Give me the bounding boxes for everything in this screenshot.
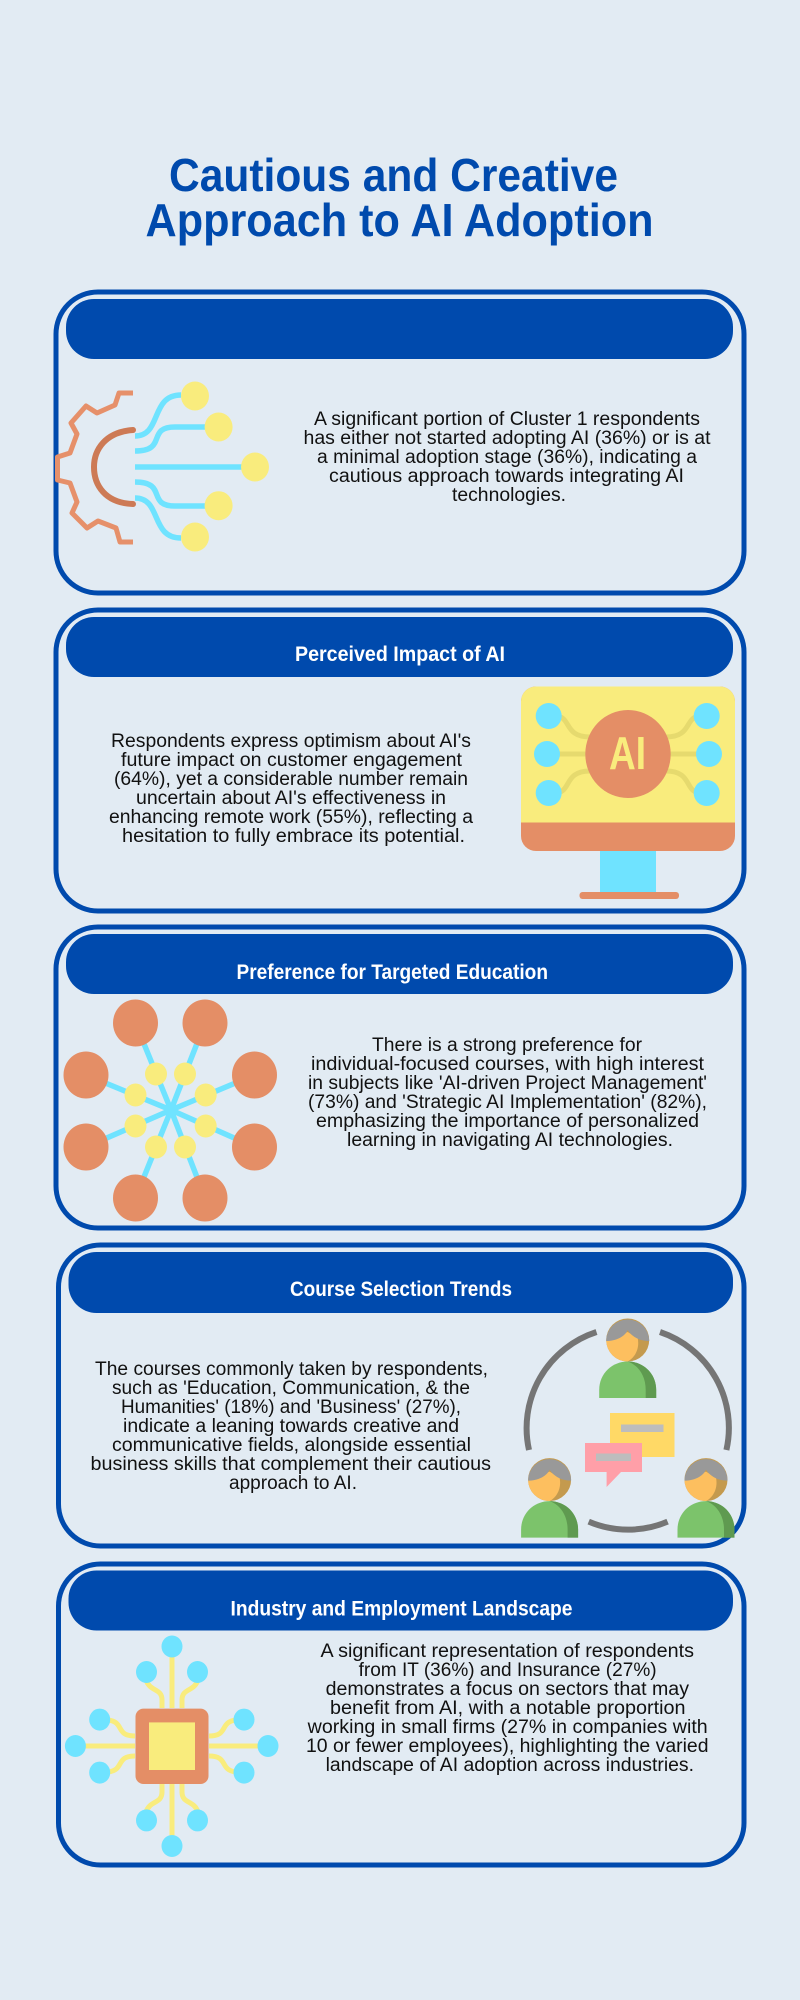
text block: course selection: communicative fields, alongside essential <box>112 1435 471 1456</box>
person: right <box>678 1458 734 1538</box>
text block: targeted education: (73%) and 'Strategic AI Implementation' (82%), <box>308 1092 707 1113</box>
text block: industry landscape: benefit from AI, with a notable proportion <box>330 1698 686 1719</box>
text block: targeted education: learning in navigating AI technologies. <box>347 1130 673 1151</box>
text block: industry landscape: working in small firms (27% in companies with <box>307 1717 708 1738</box>
icon: radial network <box>64 1000 277 1222</box>
text block: course selection: The courses commonly taken by respondents, <box>95 1359 488 1380</box>
header bar <box>66 617 733 677</box>
text block: perceived impact: (64%), yet a considerable number remain <box>114 769 468 790</box>
text block: course selection <box>90 1359 491 1494</box>
panel: perceived impact <box>56 610 744 911</box>
text block: industry landscape: landscape of AI adoption across industries. <box>326 1755 694 1776</box>
text block: industry landscape: A significant representation of respondents <box>320 1641 694 1662</box>
header bar <box>68 1570 733 1630</box>
header bar <box>66 934 733 994</box>
title: Approach to AI Adoption <box>146 194 654 246</box>
header bar: Course Selection Trends <box>290 1278 512 1301</box>
text block: adoption stage: cautious approach towards integrating AI <box>329 466 684 487</box>
text block: adoption stage: has either not started adopting AI (36%) or is at <box>304 428 711 449</box>
title: Cautious and Creative <box>169 149 618 201</box>
text block: targeted education <box>308 1035 707 1151</box>
title <box>146 149 654 246</box>
person: top <box>599 1318 656 1398</box>
icon: gear with network lines <box>58 382 269 552</box>
person: left <box>521 1458 578 1538</box>
header bar: Industry and Employment Landscape <box>230 1598 572 1620</box>
text block: industry landscape <box>306 1641 708 1776</box>
text block: perceived impact: Respondents express optimism about AI's <box>111 731 471 752</box>
header bar: Perceived Impact of AI <box>295 643 505 666</box>
header bar: empty <box>66 299 733 359</box>
panel: targeted education <box>56 927 744 1228</box>
text block: course selection: approach to AI. <box>229 1473 357 1494</box>
text block: targeted education: individual-focused courses, with high interest <box>311 1054 705 1075</box>
text block: adoption stage: A significant portion of Cluster 1 respondents <box>314 409 700 430</box>
text block: targeted education: emphasizing the importance of personalized <box>316 1111 699 1132</box>
text block: perceived impact <box>109 731 473 847</box>
text block: targeted education: in subjects like 'AI-driven Project Management' <box>308 1073 707 1094</box>
text block: adoption stage: technologies. <box>452 485 566 506</box>
text block: industry landscape: demonstrates a focus on sectors that may <box>326 1679 690 1700</box>
panel: course selection <box>58 1245 744 1546</box>
icon: AI monitor <box>521 686 735 899</box>
text block: course selection: indicate a leaning towards creative and <box>123 1416 459 1437</box>
text block: industry landscape: from IT (36%) and Insurance (27%) <box>359 1660 657 1681</box>
header bar: Preference for Targeted Education <box>236 961 548 984</box>
header bar <box>68 1252 733 1313</box>
text block: course selection: business skills that complement their cautious <box>90 1454 491 1475</box>
text block: perceived impact: future impact on customer engagement <box>121 750 463 771</box>
panel: industry landscape <box>58 1564 744 1865</box>
text block: adoption stage: a minimal adoption stage (36%), indicating a <box>317 447 697 468</box>
icon: microchip <box>65 1636 279 1857</box>
text block: perceived impact: hesitation to fully embrace its potential. <box>122 826 465 847</box>
text block: industry landscape: 10 or fewer employees), highlighting the varied <box>306 1736 708 1757</box>
icon: AI monitor: AI <box>609 727 646 779</box>
icon: people in discussion <box>521 1318 734 1538</box>
text block: perceived impact: uncertain about AI's effectiveness in <box>136 788 446 809</box>
text block: course selection: such as 'Education, Communication, & the <box>112 1378 470 1399</box>
text block: perceived impact: enhancing remote work (55%), reflecting a <box>109 807 473 828</box>
text block: course selection: Humanities' (18%) and 'Business' (27%), <box>121 1397 461 1418</box>
panel: adoption stage <box>56 292 744 593</box>
text block: adoption stage <box>304 409 711 506</box>
text block: targeted education: There is a strong preference for <box>372 1035 643 1056</box>
